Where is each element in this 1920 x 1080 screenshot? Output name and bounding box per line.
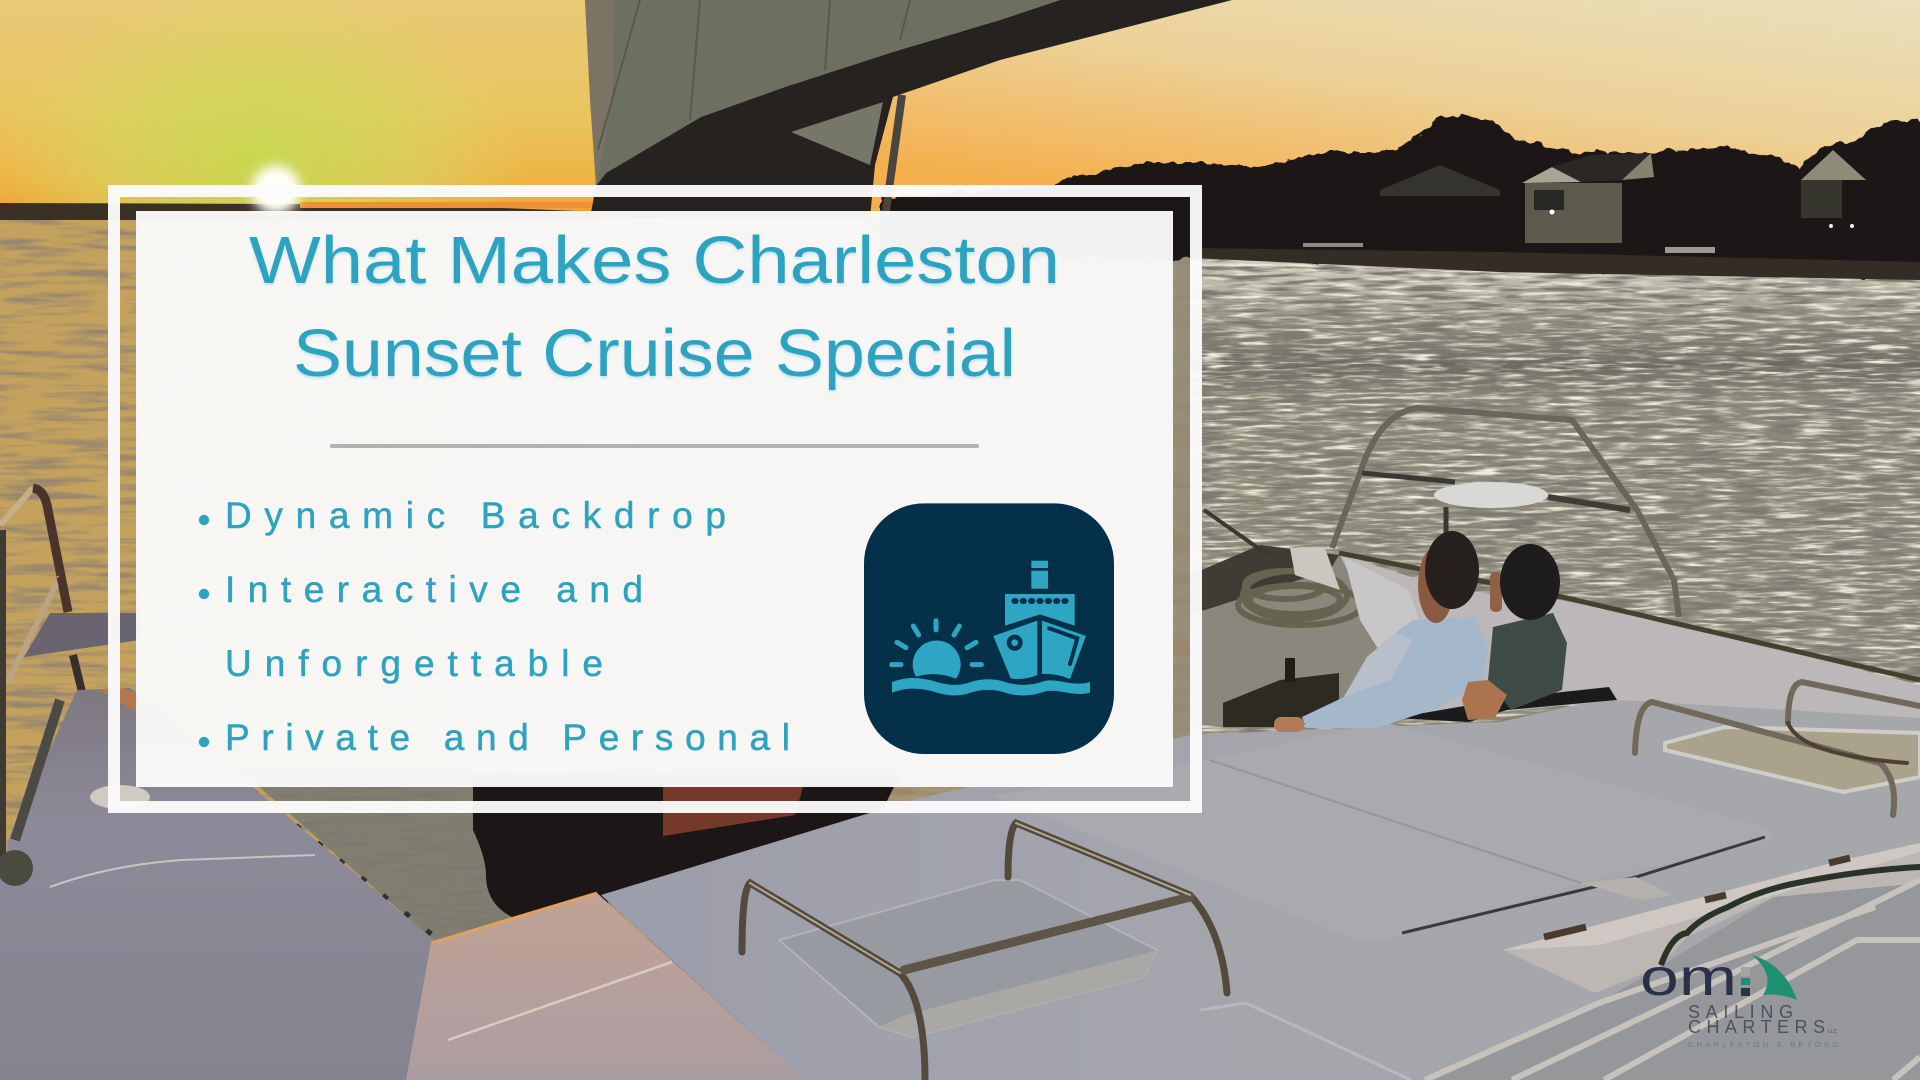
logo sail — [1752, 955, 1797, 1000]
panel: text card — [136, 211, 1173, 787]
sky — [0, 0, 1920, 355]
trampoline net — [254, 787, 613, 940]
far shore left — [0, 202, 600, 220]
water — [0, 218, 1920, 938]
logo text: CHARTERS — [1688, 1017, 1825, 1037]
lower right hull, wedge and rope — [1425, 843, 1920, 1080]
woman — [1462, 544, 1567, 720]
main grey deck — [601, 695, 1920, 1080]
bullet: dynamic backdrop: Dynamic Backdrop — [225, 495, 726, 536]
sail — [585, 0, 1232, 218]
forward deck panels — [992, 722, 1772, 940]
seat behind couple — [1339, 553, 1920, 720]
logo text — [1688, 1002, 1839, 1049]
logo text: CHARLESTON & BEYOND — [1688, 1040, 1839, 1049]
logo text: SAILING — [1688, 1002, 1793, 1022]
couple seated on deck — [1223, 531, 1617, 732]
bimini rail and table — [1332, 408, 1679, 617]
right hatch and rails — [1635, 682, 1920, 815]
logo dots — [1741, 967, 1750, 996]
title: Sunset Cruise Special — [293, 316, 1016, 391]
netting and rope coil — [1190, 510, 1430, 725]
dark cushions on net — [473, 775, 900, 918]
title — [249, 223, 1060, 391]
icon: ship and sunset — [864, 503, 1114, 754]
hatch — [779, 880, 1157, 1037]
white outer frame — [114, 191, 1196, 807]
tree line and houses — [880, 115, 1920, 280]
man — [1274, 531, 1488, 732]
bullet: private and personal: Private and Personal — [225, 717, 790, 758]
logo: OMI Sailing Charters — [1640, 949, 1839, 1049]
stainless rails — [742, 823, 1227, 1080]
pink deck segment — [406, 893, 804, 1080]
bullet list — [199, 495, 790, 758]
title: What Makes Charleston — [249, 223, 1060, 298]
left hull cushion — [0, 688, 440, 1080]
setting sun — [252, 166, 300, 214]
dark throw — [1223, 658, 1617, 727]
bullet: interactive and unforgettable: Interactive and — [225, 569, 643, 610]
logo text: LLC — [1828, 1029, 1838, 1035]
bullet: interactive and unforgettable — [199, 569, 643, 684]
left rail and step — [0, 488, 140, 870]
bullet: interactive and unforgettable: Unforgettable — [225, 643, 603, 684]
logo wordmark: om — [1640, 949, 1737, 1007]
